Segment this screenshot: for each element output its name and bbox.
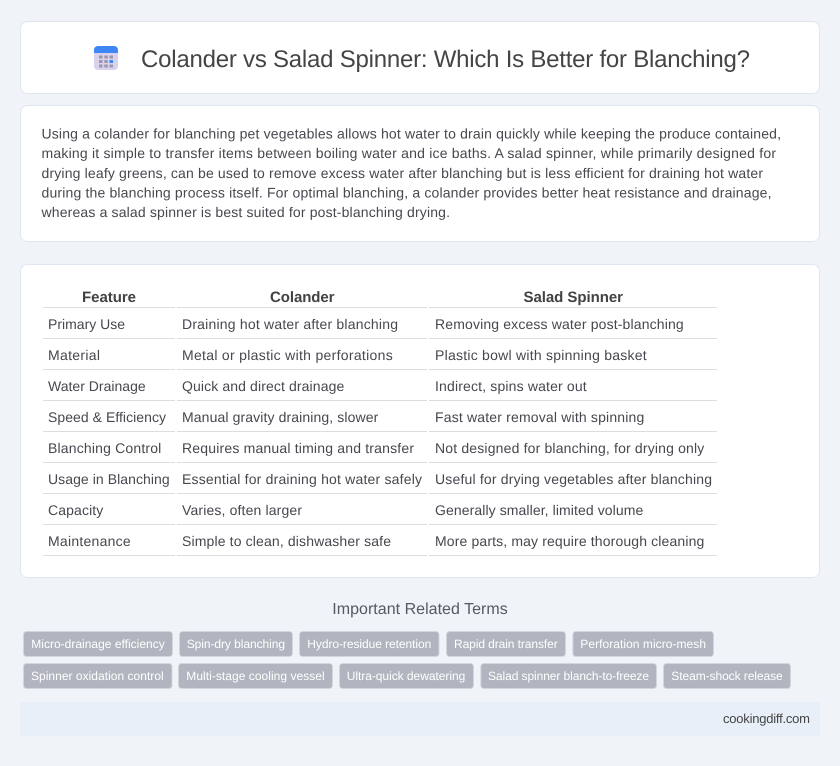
text block: introduction paragraph: during the blanching process itself. For optimal blanching, a colander provides better heat resistance and drainage,	[42, 184, 772, 200]
tag	[300, 632, 439, 656]
row: Speed & Efficiency	[43, 409, 717, 432]
text block: introduction paragraph: making it simple to transfer items between boiling water and ice baths. A salad spinner, while primarily designed for	[42, 145, 776, 161]
footer source text: cookingdiff.com	[723, 711, 810, 726]
tag	[481, 664, 656, 688]
tag: Perforation micro-mesh	[580, 637, 706, 651]
row: Material: Material	[48, 347, 100, 363]
tag: Ultra-quick dewatering	[347, 669, 465, 683]
row: Maintenance: Simple to clean, dishwasher safe	[182, 533, 391, 549]
row: Maintenance: More parts, may require thorough cleaning	[435, 533, 704, 549]
row: Capacity	[43, 502, 717, 525]
tag	[573, 632, 714, 656]
tag: Rapid drain transfer	[454, 637, 558, 651]
panel: comparison table	[20, 264, 820, 578]
tag: Salad spinner blanch-to-freeze	[488, 669, 649, 683]
row: Usage in Blanching: Usage in Blanching	[48, 471, 170, 487]
text block: introduction paragraph	[40, 126, 781, 220]
text block: introduction paragraph: drying leafy greens, can be used to remove excess water after blanching but is less efficient for draining hot water	[42, 165, 763, 181]
panel: introduction	[20, 106, 820, 242]
title: Colander vs Salad Spinner: Which Is Better for Blanching?	[141, 46, 750, 73]
row: Maintenance: Maintenance	[48, 533, 131, 549]
row: Material: Metal or plastic with perforations	[182, 347, 393, 363]
tags: related terms	[24, 632, 790, 688]
tag	[24, 632, 172, 656]
tag: Spin-dry blanching	[187, 637, 285, 651]
table header: Feature	[82, 289, 136, 306]
text block: introduction paragraph: Using a colander for blanching pet vegetables allows hot water to drain quickly while keeping the produce contained,	[42, 126, 781, 142]
table header: Colander	[270, 289, 335, 306]
row: Blanching Control: Blanching Control	[48, 440, 161, 456]
row: Capacity: Generally smaller, limited volume	[435, 502, 644, 518]
row: Usage in Blanching	[43, 471, 717, 494]
tag	[24, 664, 172, 688]
row: Blanching Control	[43, 440, 717, 463]
row: Speed & Efficiency: Fast water removal with spinning	[435, 409, 644, 425]
tag	[178, 664, 332, 688]
row: Water Drainage	[43, 378, 717, 401]
tag: Hydro-residue retention	[307, 637, 431, 651]
row: Capacity: Varies, often larger	[182, 502, 302, 518]
table header: Salad Spinner	[524, 289, 623, 306]
tag: Micro-drainage efficiency	[31, 637, 165, 651]
row: Material: Plastic bowl with spinning basket	[435, 347, 647, 363]
row: Water Drainage: Indirect, spins water out	[435, 378, 587, 394]
tag	[180, 632, 292, 656]
text block: introduction paragraph: whereas a salad spinner is best suited for post-blanching drying.	[40, 204, 450, 220]
tag: Spinner oxidation control	[31, 669, 164, 683]
row: Primary Use	[43, 316, 717, 339]
row: Capacity: Capacity	[48, 502, 103, 518]
row: Usage in Blanching: Essential for draining hot water safely	[182, 471, 422, 487]
row: Maintenance	[43, 533, 717, 556]
tag	[340, 664, 474, 688]
heading: related terms: Important Related Terms	[332, 601, 508, 618]
row: Blanching Control: Not designed for blanching, for drying only	[435, 440, 704, 456]
table header	[43, 289, 717, 308]
tag: Steam-shock release	[671, 669, 783, 683]
row: Speed & Efficiency: Speed & Efficiency	[48, 409, 166, 425]
panel: title header	[20, 22, 820, 94]
icon: calendar	[94, 46, 118, 70]
footer	[20, 702, 820, 736]
row: Water Drainage: Water Drainage	[48, 378, 146, 394]
row: Speed & Efficiency: Manual gravity draining, slower	[182, 409, 379, 425]
row: Primary Use: Draining hot water after blanching	[182, 316, 398, 332]
tag: Multi-stage cooling vessel	[186, 669, 325, 683]
row: Usage in Blanching: Useful for drying vegetables after blanching	[435, 471, 712, 487]
row: Water Drainage: Quick and direct drainage	[182, 378, 345, 394]
row: Material	[43, 347, 717, 370]
tag	[446, 632, 566, 656]
row: Blanching Control: Requires manual timing and transfer	[182, 440, 414, 456]
row: Primary Use: Primary Use	[48, 316, 125, 332]
tag	[664, 664, 790, 688]
row: Primary Use: Removing excess water post-blanching	[435, 316, 684, 332]
